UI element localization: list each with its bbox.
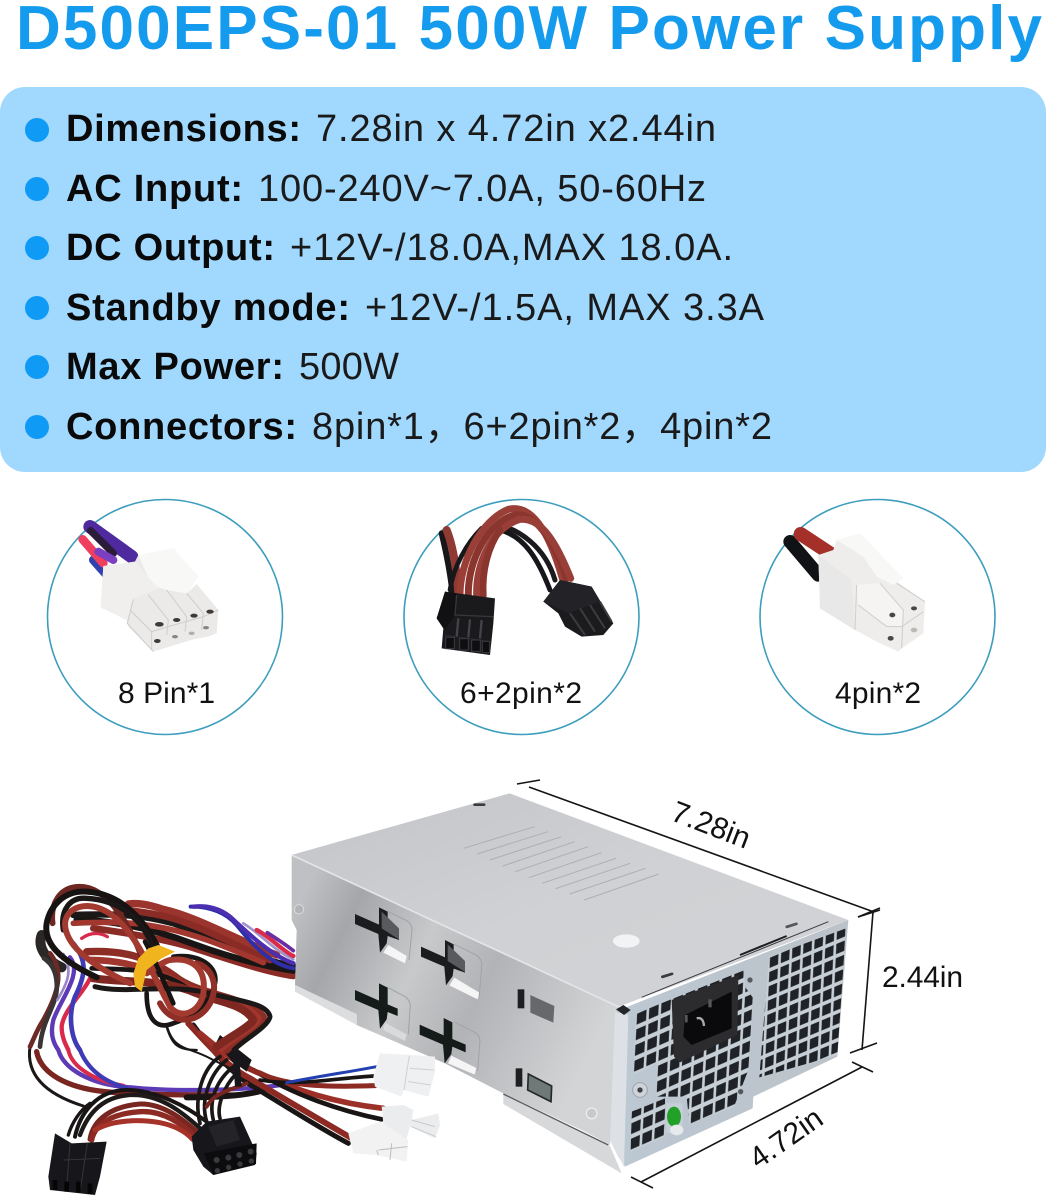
icon: left 8 pin black connector	[48, 1133, 107, 1195]
side cutout: lower right	[420, 1018, 480, 1075]
icon: black zip tie	[217, 1035, 252, 1087]
icon: AC inlet socket	[672, 975, 738, 1062]
spec row: max power: 500W	[299, 346, 399, 388]
side cutout: lower left	[355, 983, 410, 1041]
label: 6+2pin*2: 6+2pin*2	[460, 677, 582, 710]
side cutout: upper left	[355, 907, 412, 963]
spec row: DC output: DC Output:	[66, 227, 275, 269]
dimension lines	[517, 780, 880, 1188]
dimension line: length	[517, 780, 880, 917]
icon: white cable connectors	[348, 1053, 440, 1162]
spec row: dimensions: 7.28in x 4.72in x2.44in	[316, 108, 716, 150]
side cutout: upper right	[421, 940, 482, 999]
icon: green LED	[667, 1107, 681, 1127]
cable bundle: upper wires	[30, 887, 293, 1050]
spec row: AC input: 100-240V~7.0A, 50-60Hz	[258, 168, 706, 210]
dimension line: height	[850, 910, 880, 1053]
spec row: max power	[25, 346, 399, 388]
front face	[610, 920, 848, 1167]
connector callout: 8 pin	[48, 500, 282, 734]
label: 8 Pin*1: 8 Pin*1	[118, 677, 215, 710]
icon: yellow cable strap	[133, 945, 175, 992]
icon: 4 pin connector	[790, 533, 925, 652]
dimension line: width	[631, 1062, 873, 1188]
label: 2.44in: 2.44in	[882, 961, 963, 994]
spec row: DC output: +12V-/18.0A,MAX 18.0A.	[290, 227, 733, 269]
connector callout: 4 pin	[760, 500, 995, 734]
spec row: DC output	[25, 227, 733, 269]
power supply unit	[291, 793, 848, 1173]
vent grid: left	[633, 971, 753, 1124]
label: 4.72in: 4.72in	[743, 1101, 829, 1175]
icon: right 8 pin black connector	[192, 1117, 257, 1175]
spec row: max power: Max Power:	[66, 346, 284, 388]
icon: 8 pin connector	[83, 527, 218, 652]
spec row: AC input	[25, 168, 706, 210]
spec row: standby mode: +12V-/1.5A, MAX 3.3A	[365, 287, 765, 329]
label: 4pin*2: 4pin*2	[835, 677, 921, 710]
connector callout: 6+2 pin	[404, 500, 639, 734]
spec row: dimensions	[25, 108, 716, 150]
spec row: AC input: AC Input:	[66, 168, 243, 210]
spec row: standby mode: Standby mode:	[66, 287, 350, 329]
spec row: standby mode	[25, 287, 765, 329]
cable bundle: lower wires	[29, 1023, 383, 1195]
top face	[291, 793, 848, 1007]
vent grid: right	[759, 928, 846, 1077]
panel: specifications	[0, 87, 1046, 472]
label: 7.28in: 7.28in	[667, 795, 755, 856]
spec row: dimensions: Dimensions:	[66, 108, 301, 150]
side slots	[516, 989, 554, 1102]
spec row: connectors	[25, 406, 772, 448]
spec row: connectors: Connectors:	[66, 406, 297, 448]
spec row: connectors: 8pin*1，6+2pin*2，4pin*2	[312, 406, 772, 448]
icon: 6+2 pin connectors	[437, 509, 613, 655]
vent lines	[464, 827, 659, 900]
side face	[292, 855, 622, 1173]
